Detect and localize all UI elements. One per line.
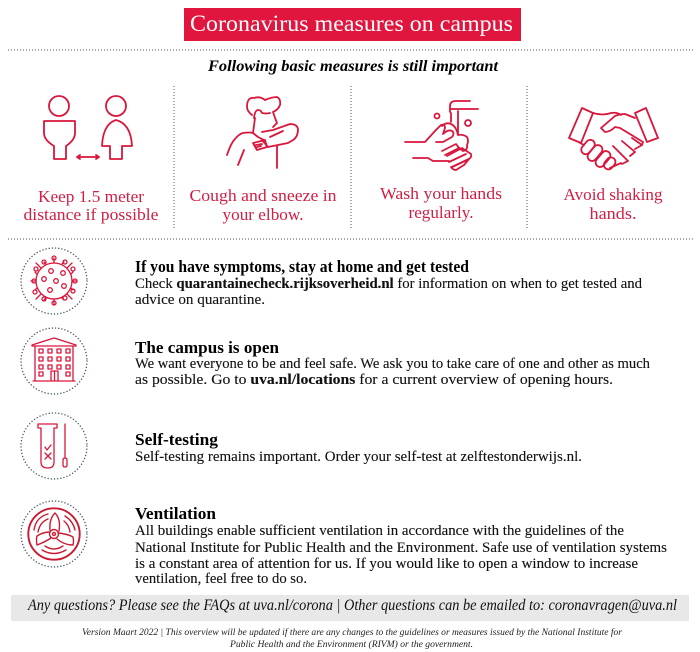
body text: is a constant area of attention for us. If you would like to open a window to increase [135,556,638,572]
body text [135,276,642,308]
version note [82,627,622,650]
panel: no handshake: hands. [590,204,636,223]
heading: Self-testing [135,430,218,449]
heading: The campus is open [135,338,280,357]
heading: If you have symptoms, stay at home and get tested [135,257,469,276]
body text: advice on quarantine. [135,292,265,308]
panel: symptoms [21,248,642,314]
panel: self-testing [21,413,582,479]
icon: building in dotted circle [21,328,87,394]
body text [135,356,650,388]
subtitle: Following basic measures is still important [207,58,499,75]
icon: hands under tap [405,101,478,170]
panel: keep distance: distance if possible [24,205,158,224]
panel: cough [190,97,337,224]
panel: wash hands [380,101,502,222]
footer questions bar [11,595,689,621]
label: Avoid shaking [564,185,663,204]
body text: Self-testing remains important. Order your self-test at zelftestonderwijs.nl. [135,449,582,465]
panel: wash hands: regularly. [408,203,474,222]
label: Cough and sneeze in [190,186,337,205]
icon: virus in dotted circle [21,248,87,314]
panel: no handshake [564,108,663,223]
body text: ventilation, feel free to do so. [135,571,307,587]
icon: person coughing into elbow [227,97,298,168]
body text: We want everyone to be and feel safe. We ask you to take care of one and other as much [135,356,650,372]
panel: cough: your elbow. [222,205,304,224]
body text: as possible. Go to uva.nl/locations for a current overview of opening hours. [135,372,613,388]
body text: Check quarantainecheck.rijksoverheid.nl for information on when to get tested and [135,276,642,292]
panel: campus open [21,328,650,394]
body text: National Institute for Public Health and the Environment. Safe use of ventilation systems [135,540,667,556]
title: Coronavirus measures on campus [190,11,513,36]
label: Wash your hands [380,184,502,203]
version note: Public Health and the Environment (RIVM) or the government. [229,639,473,650]
body text [135,523,667,587]
icon: test tube and swab in dotted circle [21,413,87,479]
icon: fan in dotted circle [21,501,87,567]
version note: Version Maart 2022 | This overview will be updated if there are any changes to the guidelines or measures issued by the National Institute for [82,627,622,638]
icon: two people with arrow [44,96,132,159]
panel: keep distance [24,96,158,224]
body text: All buildings enable sufficient ventilation in accordance with the guidelines of the [135,523,624,539]
icon: handshake [569,108,658,171]
title [184,8,521,41]
panel: ventilation [21,501,667,587]
label: Keep 1.5 meter [38,187,144,206]
heading: Ventilation [135,504,217,523]
